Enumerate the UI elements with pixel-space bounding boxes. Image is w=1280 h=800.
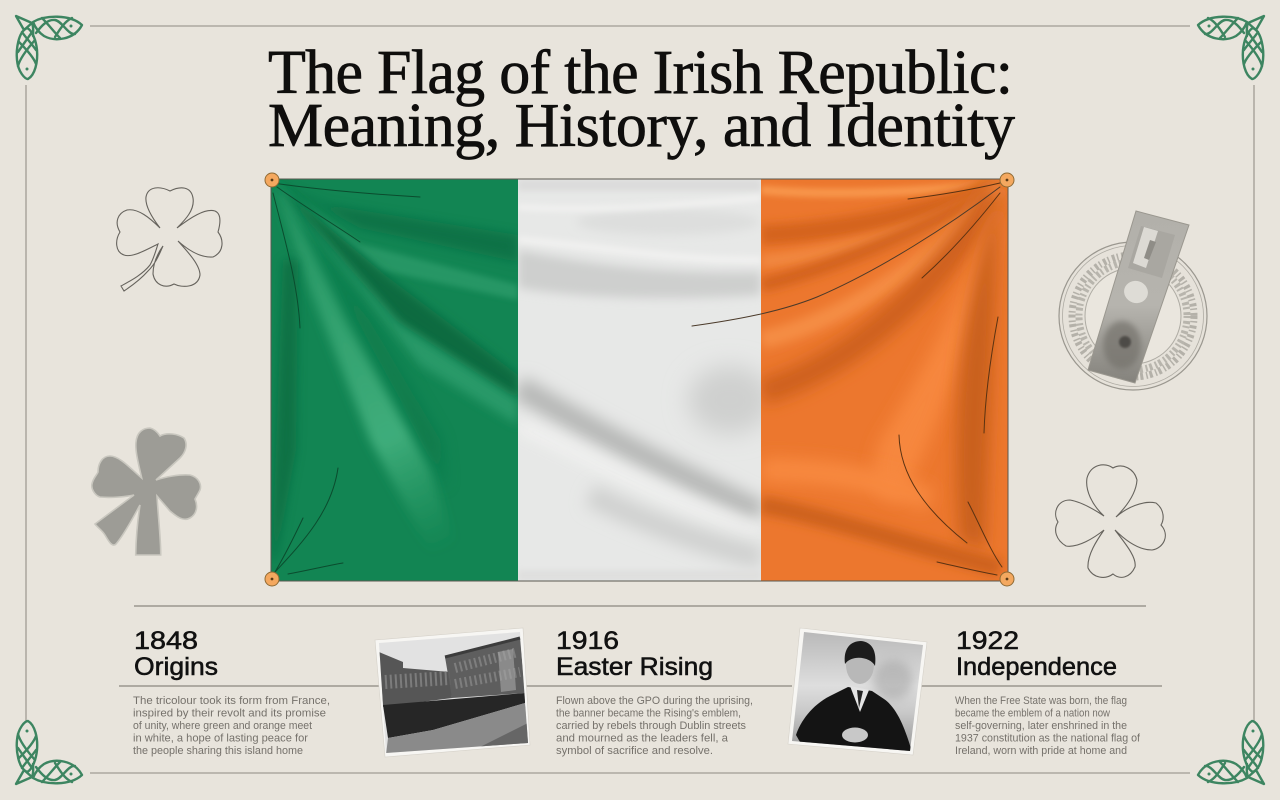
year and heading: Origins — [134, 653, 218, 681]
year and heading: 1848 — [134, 627, 198, 655]
body text — [133, 695, 330, 757]
body text — [955, 695, 1141, 757]
body text: The tricolour took its form from France, — [133, 695, 330, 707]
body text: symbol of sacrifice and resolve. — [556, 745, 713, 757]
icon: celtic knot bottom right — [1198, 721, 1264, 784]
icon: solid grey shamrock — [92, 428, 201, 555]
year and heading — [134, 627, 218, 681]
body text: Flown above the GPO during the uprising, — [556, 695, 753, 707]
body text: When the Free State was born, the flag — [955, 695, 1127, 707]
section: 1916 Easter Rising — [556, 627, 753, 757]
white band — [518, 179, 772, 581]
icon: celtic knot top right — [1198, 16, 1264, 79]
body text: carried by rebels through Dublin streets — [556, 720, 746, 732]
grommet top right — [1000, 173, 1014, 187]
body text: self-governing, later enshrined in the — [955, 720, 1127, 732]
photo: portrait of seated man — [785, 625, 930, 760]
section: 1848 Origins — [133, 627, 330, 757]
icon: shamrock outline top left — [117, 188, 222, 291]
body text: the people sharing this island home — [133, 745, 303, 757]
section: 1922 Independence — [955, 627, 1141, 757]
green band — [271, 179, 518, 581]
grommet bottom right — [1000, 572, 1014, 586]
body text: of unity, where green and orange meet — [133, 720, 312, 732]
body text: became the emblem of a nation now — [955, 708, 1110, 720]
year and heading — [556, 627, 713, 681]
body text: 1937 constitution as the national flag of — [955, 732, 1141, 744]
flag of Ireland — [265, 173, 1014, 586]
body text: inspired by their revolt and its promise — [133, 708, 326, 720]
grommet bottom left — [265, 572, 279, 586]
year and heading: Easter Rising — [556, 653, 713, 681]
title — [268, 39, 1015, 160]
body text: in white, a hope of lasting peace for — [133, 732, 308, 744]
timeline rules — [119, 606, 1162, 686]
icon: engraved medal with tilted stamp — [1059, 211, 1207, 390]
icon: celtic knot bottom left — [16, 721, 82, 784]
year and heading: 1916 — [556, 627, 619, 655]
body text: Ireland, worn with pride at home and — [955, 745, 1127, 757]
title: The Flag of the Irish Republic: — [268, 39, 1013, 107]
year and heading — [956, 627, 1117, 681]
year and heading: Independence — [956, 653, 1117, 681]
photo: crowd before buildings — [375, 628, 535, 758]
icon: shamrock outline bottom right — [1056, 465, 1165, 577]
grommet top left — [265, 173, 279, 187]
flag fold lines — [273, 183, 1002, 575]
orange band — [761, 179, 1008, 581]
title: Meaning, History, and Identity — [268, 92, 1015, 160]
year and heading: 1922 — [956, 627, 1019, 655]
icon: celtic knot top left — [16, 16, 82, 79]
body text — [556, 695, 753, 757]
body text: the banner became the Rising's emblem, — [556, 708, 741, 720]
body text: and mourned as the leaders fell, a — [556, 732, 729, 744]
